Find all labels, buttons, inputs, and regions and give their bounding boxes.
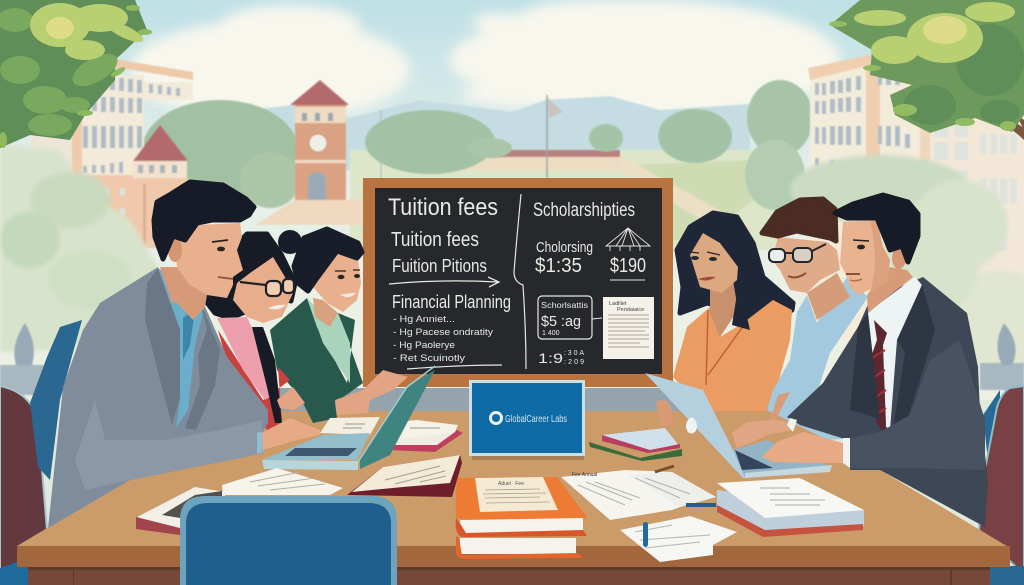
distant hills xyxy=(250,96,750,170)
pinned paper xyxy=(603,297,654,359)
chalk figures xyxy=(538,350,584,366)
campus lawn xyxy=(350,95,780,250)
open book behind left laptop xyxy=(320,417,463,452)
green blazer xyxy=(270,298,363,423)
facial features xyxy=(212,240,233,279)
chalk figures: 1:9 xyxy=(538,350,563,366)
papers: loose sheet with pen xyxy=(620,516,737,562)
chalkboard list xyxy=(393,314,493,364)
chair back dark strip beneath left man's sleeve xyxy=(185,395,240,435)
chalk figures: :209 xyxy=(564,359,584,366)
glasses xyxy=(769,244,826,262)
tree: top left xyxy=(0,0,152,148)
tie xyxy=(870,320,887,433)
background: sky xyxy=(0,0,1024,400)
pink top xyxy=(217,317,270,400)
left campus building xyxy=(30,60,193,250)
table xyxy=(17,411,1010,585)
shirt xyxy=(868,277,922,430)
book: open white, left xyxy=(136,468,343,535)
chalkboard amounts xyxy=(535,239,646,280)
person: left woman in green xyxy=(270,229,408,423)
chalk box: scholarship amount: 1 400 xyxy=(542,330,560,337)
book stack: orange xyxy=(456,477,587,559)
chalk box: scholarship amount xyxy=(538,296,602,339)
books: right of sign xyxy=(589,428,682,461)
pinned paper: Pendaiaice xyxy=(617,307,644,313)
lapel xyxy=(145,268,180,425)
sleeve xyxy=(75,400,263,490)
grey suit xyxy=(48,267,268,528)
chair: left maroon xyxy=(0,386,47,585)
chalkboard heading: financial planning: Financial Planning xyxy=(392,292,511,312)
wall strip behind table xyxy=(270,388,790,411)
book: maroon open xyxy=(347,455,462,497)
person: right man with glasses xyxy=(762,199,870,440)
person: left man in grey suit xyxy=(48,182,268,528)
shirt xyxy=(158,268,205,428)
chalkboard heading: tuition fees: Tuition fees xyxy=(388,194,498,221)
distant trees xyxy=(142,80,813,210)
glasses xyxy=(240,279,294,296)
chalkboard list: - Hg Anniet... xyxy=(393,314,455,325)
sign logo xyxy=(489,411,503,425)
hair xyxy=(762,199,836,241)
chalkboard heading: scholarships: Scholarshipties xyxy=(533,200,635,221)
chalkboard text: tuition lines: Tuition fees xyxy=(391,229,479,251)
red jacket xyxy=(218,330,290,430)
chair: right maroon xyxy=(979,386,1024,585)
chalkboard xyxy=(363,178,673,387)
right campus building xyxy=(808,54,1024,340)
chalkboard list: - Hg Pacese ondratity xyxy=(393,327,493,338)
chalkboard amounts: $190 xyxy=(610,255,646,277)
paper stack: right xyxy=(717,478,864,537)
facial features xyxy=(846,240,869,281)
hair xyxy=(677,213,793,330)
person: right man in suit xyxy=(787,195,988,527)
chalkboard list: - Hg Paolerye xyxy=(393,340,455,351)
facial features xyxy=(690,252,720,281)
sleeve xyxy=(850,340,985,470)
laptop: right silver xyxy=(645,373,832,478)
chalk icon: roof xyxy=(606,228,650,251)
suit xyxy=(787,277,988,527)
chalkboard list: - Ret Scuinotly xyxy=(393,353,465,364)
chalkboard text: tuition lines xyxy=(391,229,487,276)
papers: open brochure xyxy=(561,466,716,520)
person: right woman xyxy=(656,213,793,427)
orange top xyxy=(673,300,792,411)
chalk divider xyxy=(514,194,526,369)
clouds xyxy=(130,0,840,120)
chalkboard amounts: $1:35 xyxy=(535,255,582,277)
clock tower xyxy=(255,80,362,225)
chalkboard text: tuition lines: Fuition Pitions xyxy=(392,256,487,276)
pinned paper: Ladiliet xyxy=(609,301,627,307)
papers: open brochure: Fee Annual xyxy=(572,472,597,478)
lapel xyxy=(893,285,935,432)
hair xyxy=(154,182,254,259)
chair: front blue xyxy=(180,496,397,585)
chalk figures: :30A xyxy=(564,350,584,357)
hair xyxy=(294,229,362,291)
lower foliage haze xyxy=(0,145,1024,370)
tree: top right xyxy=(829,0,1024,140)
balustrade xyxy=(0,323,1024,395)
sign: GlobalCareer Labs xyxy=(469,380,585,460)
chalk arrow xyxy=(389,277,499,287)
facial features xyxy=(335,270,360,297)
arm and hand xyxy=(335,370,408,415)
person: left woman with glasses xyxy=(205,234,305,430)
chalkboard amounts: Cholorsing xyxy=(536,239,593,256)
blue shirt xyxy=(767,277,870,440)
hands on right laptop xyxy=(732,418,850,468)
chalk box: scholarship amount: $5 :ag xyxy=(541,313,581,330)
hand on laptop: left man xyxy=(257,418,320,454)
laptop: left teal xyxy=(262,366,435,470)
sign text: GlobalCareer Labs xyxy=(505,414,567,425)
chair: left blue xyxy=(30,320,82,480)
hair xyxy=(835,195,918,262)
ponytail xyxy=(252,327,282,423)
chalk box: scholarship amount: Schorlsattis xyxy=(541,301,588,310)
book stack: orange: Aduel · Fee xyxy=(498,481,524,487)
